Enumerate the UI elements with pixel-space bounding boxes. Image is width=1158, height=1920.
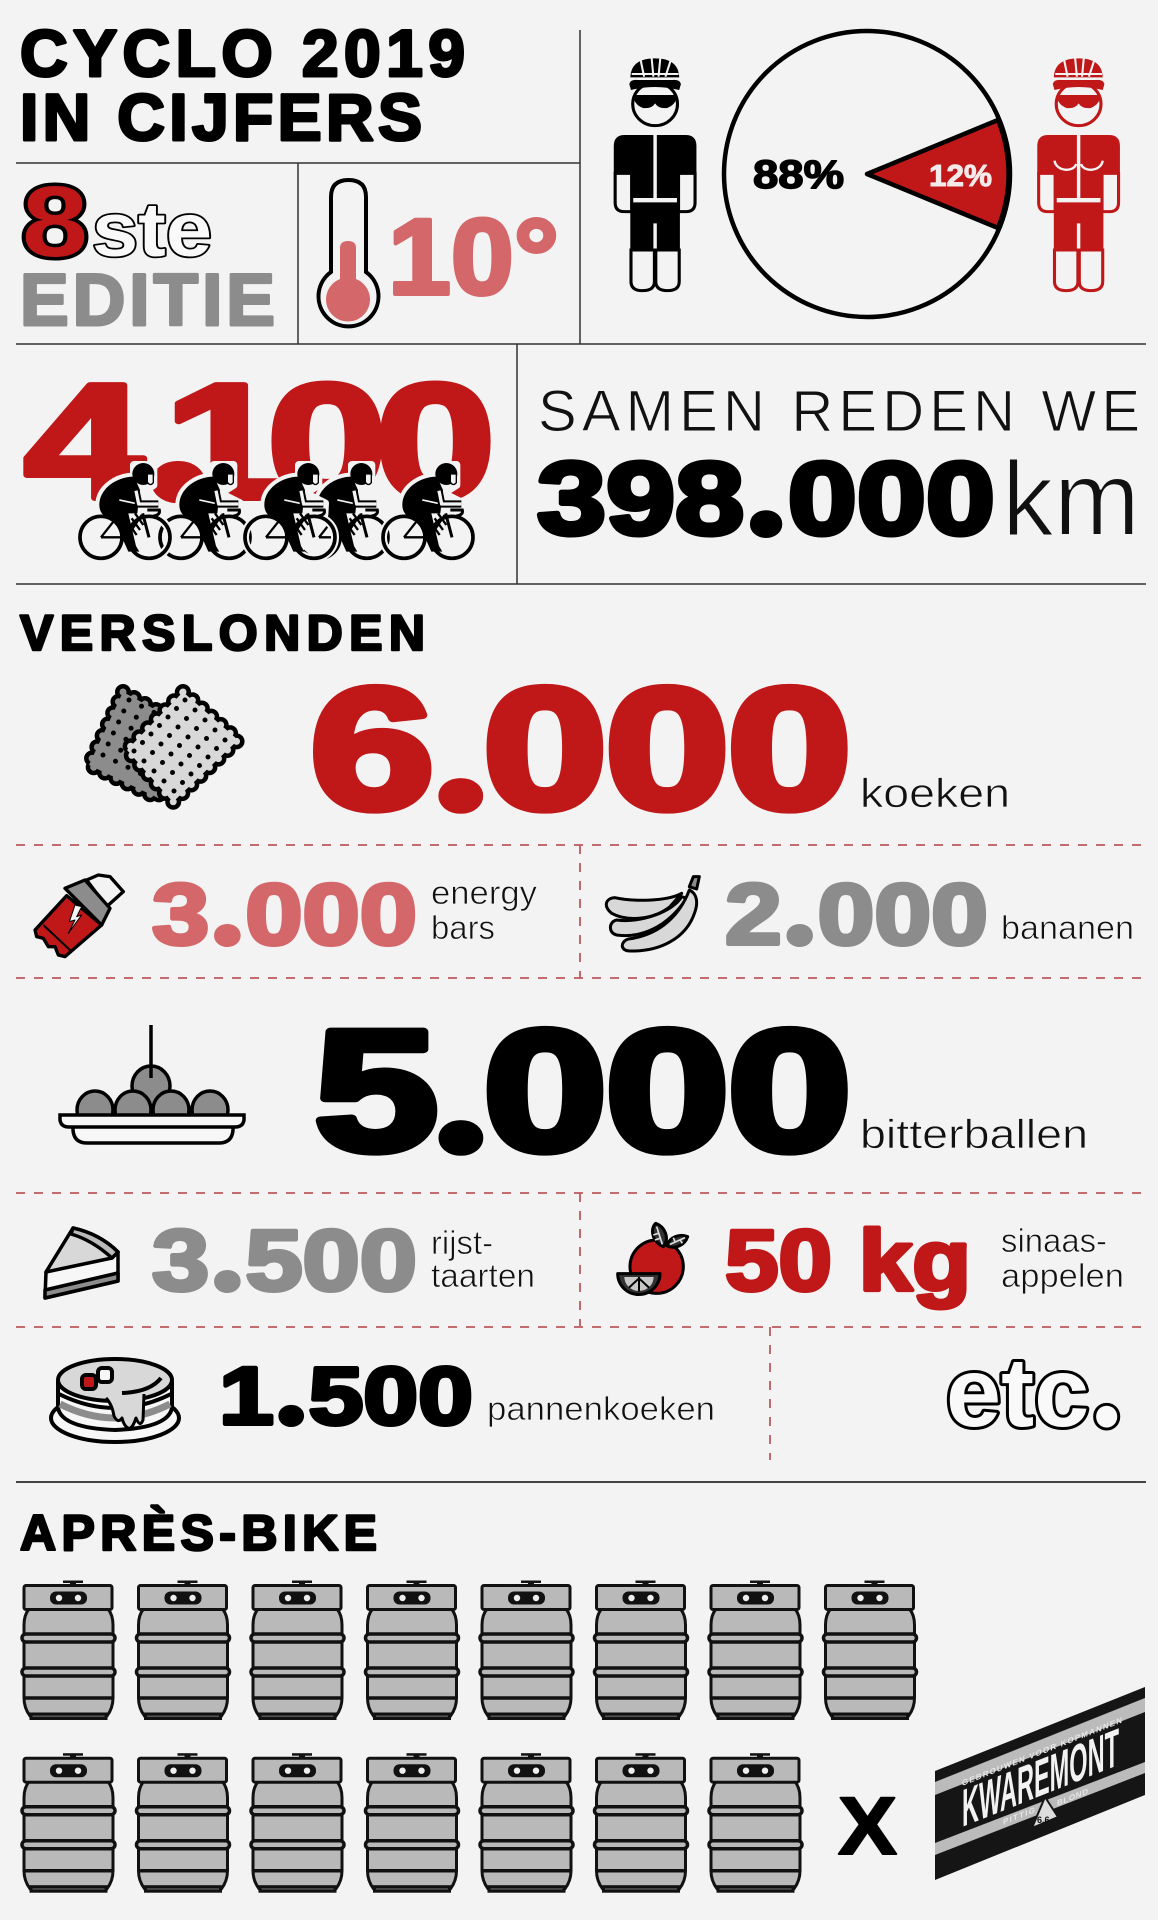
stat: 3.500 rijsttaarten: rijst- bbox=[431, 1224, 493, 1261]
stat: 50 kg sinaasappelen: sinaas- bbox=[1001, 1222, 1107, 1259]
stat: 3.500 rijsttaarten: taarten bbox=[431, 1257, 535, 1294]
stat: 1.500 pannenkoeken: pannenkoeken bbox=[487, 1390, 715, 1427]
temperature: 10° bbox=[388, 196, 559, 317]
label 88%: 88% bbox=[753, 153, 844, 197]
edition word: EDITIE bbox=[20, 260, 275, 341]
logo: Kwaremont: GEBROUWEN VOOR KOPMANNEN bbox=[962, 1715, 1122, 1788]
icon: energy bar bbox=[35, 875, 123, 957]
title bbox=[20, 16, 465, 154]
distance unit: km bbox=[1002, 440, 1140, 558]
icon: bananas bbox=[606, 877, 699, 951]
kegs: row 1 bbox=[22, 1580, 916, 1718]
edition number: 8 bbox=[22, 166, 88, 278]
stat: 6.000 koeken: 6.000 bbox=[310, 653, 852, 845]
stat: 1.500 pannenkoeken bbox=[219, 1329, 715, 1448]
multiply sign: X bbox=[838, 1781, 897, 1872]
stat: 3.500 rijsttaarten bbox=[152, 1190, 535, 1315]
logo: Kwaremont bbox=[935, 1687, 1145, 1880]
stat: 5.000 bitterballen: bitterballen bbox=[860, 1111, 1088, 1157]
title: IN CIJFERS bbox=[20, 80, 422, 154]
icon: thermometer bbox=[318, 180, 378, 326]
logo: Kwaremont: BLOND bbox=[1057, 1786, 1088, 1808]
icon: red cyclist bbox=[1037, 58, 1120, 291]
icon: bitterballen on plate bbox=[60, 1025, 244, 1143]
heading: verslonden: VERSLONDEN bbox=[20, 605, 425, 661]
stat: 2.000 bananen: 2.000 bbox=[725, 844, 988, 969]
distance intro: SAMEN REDEN WE bbox=[538, 379, 1140, 444]
distance block bbox=[537, 379, 1140, 564]
logo: Kwaremont: 6.6 bbox=[1037, 1815, 1050, 1825]
stat: 50 kg sinaasappelen: 50 kg bbox=[725, 1213, 971, 1309]
icon: cookies bbox=[89, 692, 238, 802]
stat: 5.000 bitterballen: 5.000 bbox=[314, 995, 852, 1187]
heading: apres-bike: APRÈS-BIKE bbox=[20, 1505, 377, 1561]
icon: oranges bbox=[618, 1223, 688, 1294]
stat: 5.000 bitterballen bbox=[314, 995, 1088, 1187]
icon: group of riders bbox=[80, 463, 473, 558]
kegs: row 2 bbox=[22, 1753, 802, 1891]
stat: 2.000 bananen bbox=[725, 844, 1134, 969]
stat: 3.000 energy bars: bars bbox=[431, 909, 495, 946]
logo: Kwaremont: PITTIG bbox=[1003, 1805, 1035, 1827]
stat: 50 kg sinaasappelen bbox=[725, 1213, 1124, 1309]
stat: 3.000 energy bars bbox=[152, 844, 538, 969]
stat: 3.000 energy bars: 3.000 bbox=[152, 844, 417, 969]
stat: 3.000 energy bars: energy bbox=[431, 874, 538, 911]
stat: 3.500 rijsttaarten: 3.500 bbox=[152, 1190, 417, 1315]
edition suffix: ste bbox=[92, 188, 212, 273]
icon: rice tart bbox=[45, 1228, 118, 1298]
etc: etc. bbox=[946, 1313, 1124, 1455]
wedge 12% bbox=[867, 120, 1009, 228]
label 12%: 12% bbox=[929, 158, 992, 193]
icon: black cyclist bbox=[614, 58, 696, 291]
participants number: 4.100 bbox=[24, 308, 496, 546]
stat: 50 kg sinaasappelen: appelen bbox=[1001, 1257, 1124, 1294]
icon: pancakes bbox=[51, 1359, 179, 1442]
stat: 2.000 bananen: bananen bbox=[1001, 909, 1134, 946]
title: CYCLO 2019 bbox=[20, 16, 465, 90]
stat: 6.000 koeken: koeken bbox=[860, 770, 1010, 816]
distance number: 398 .000 bbox=[537, 415, 995, 564]
pie chart: 88% / 12% bbox=[724, 31, 1010, 317]
edition block: 8ste editie bbox=[20, 166, 275, 341]
stat: 1.500 pannenkoeken: 1.500 bbox=[219, 1329, 473, 1448]
